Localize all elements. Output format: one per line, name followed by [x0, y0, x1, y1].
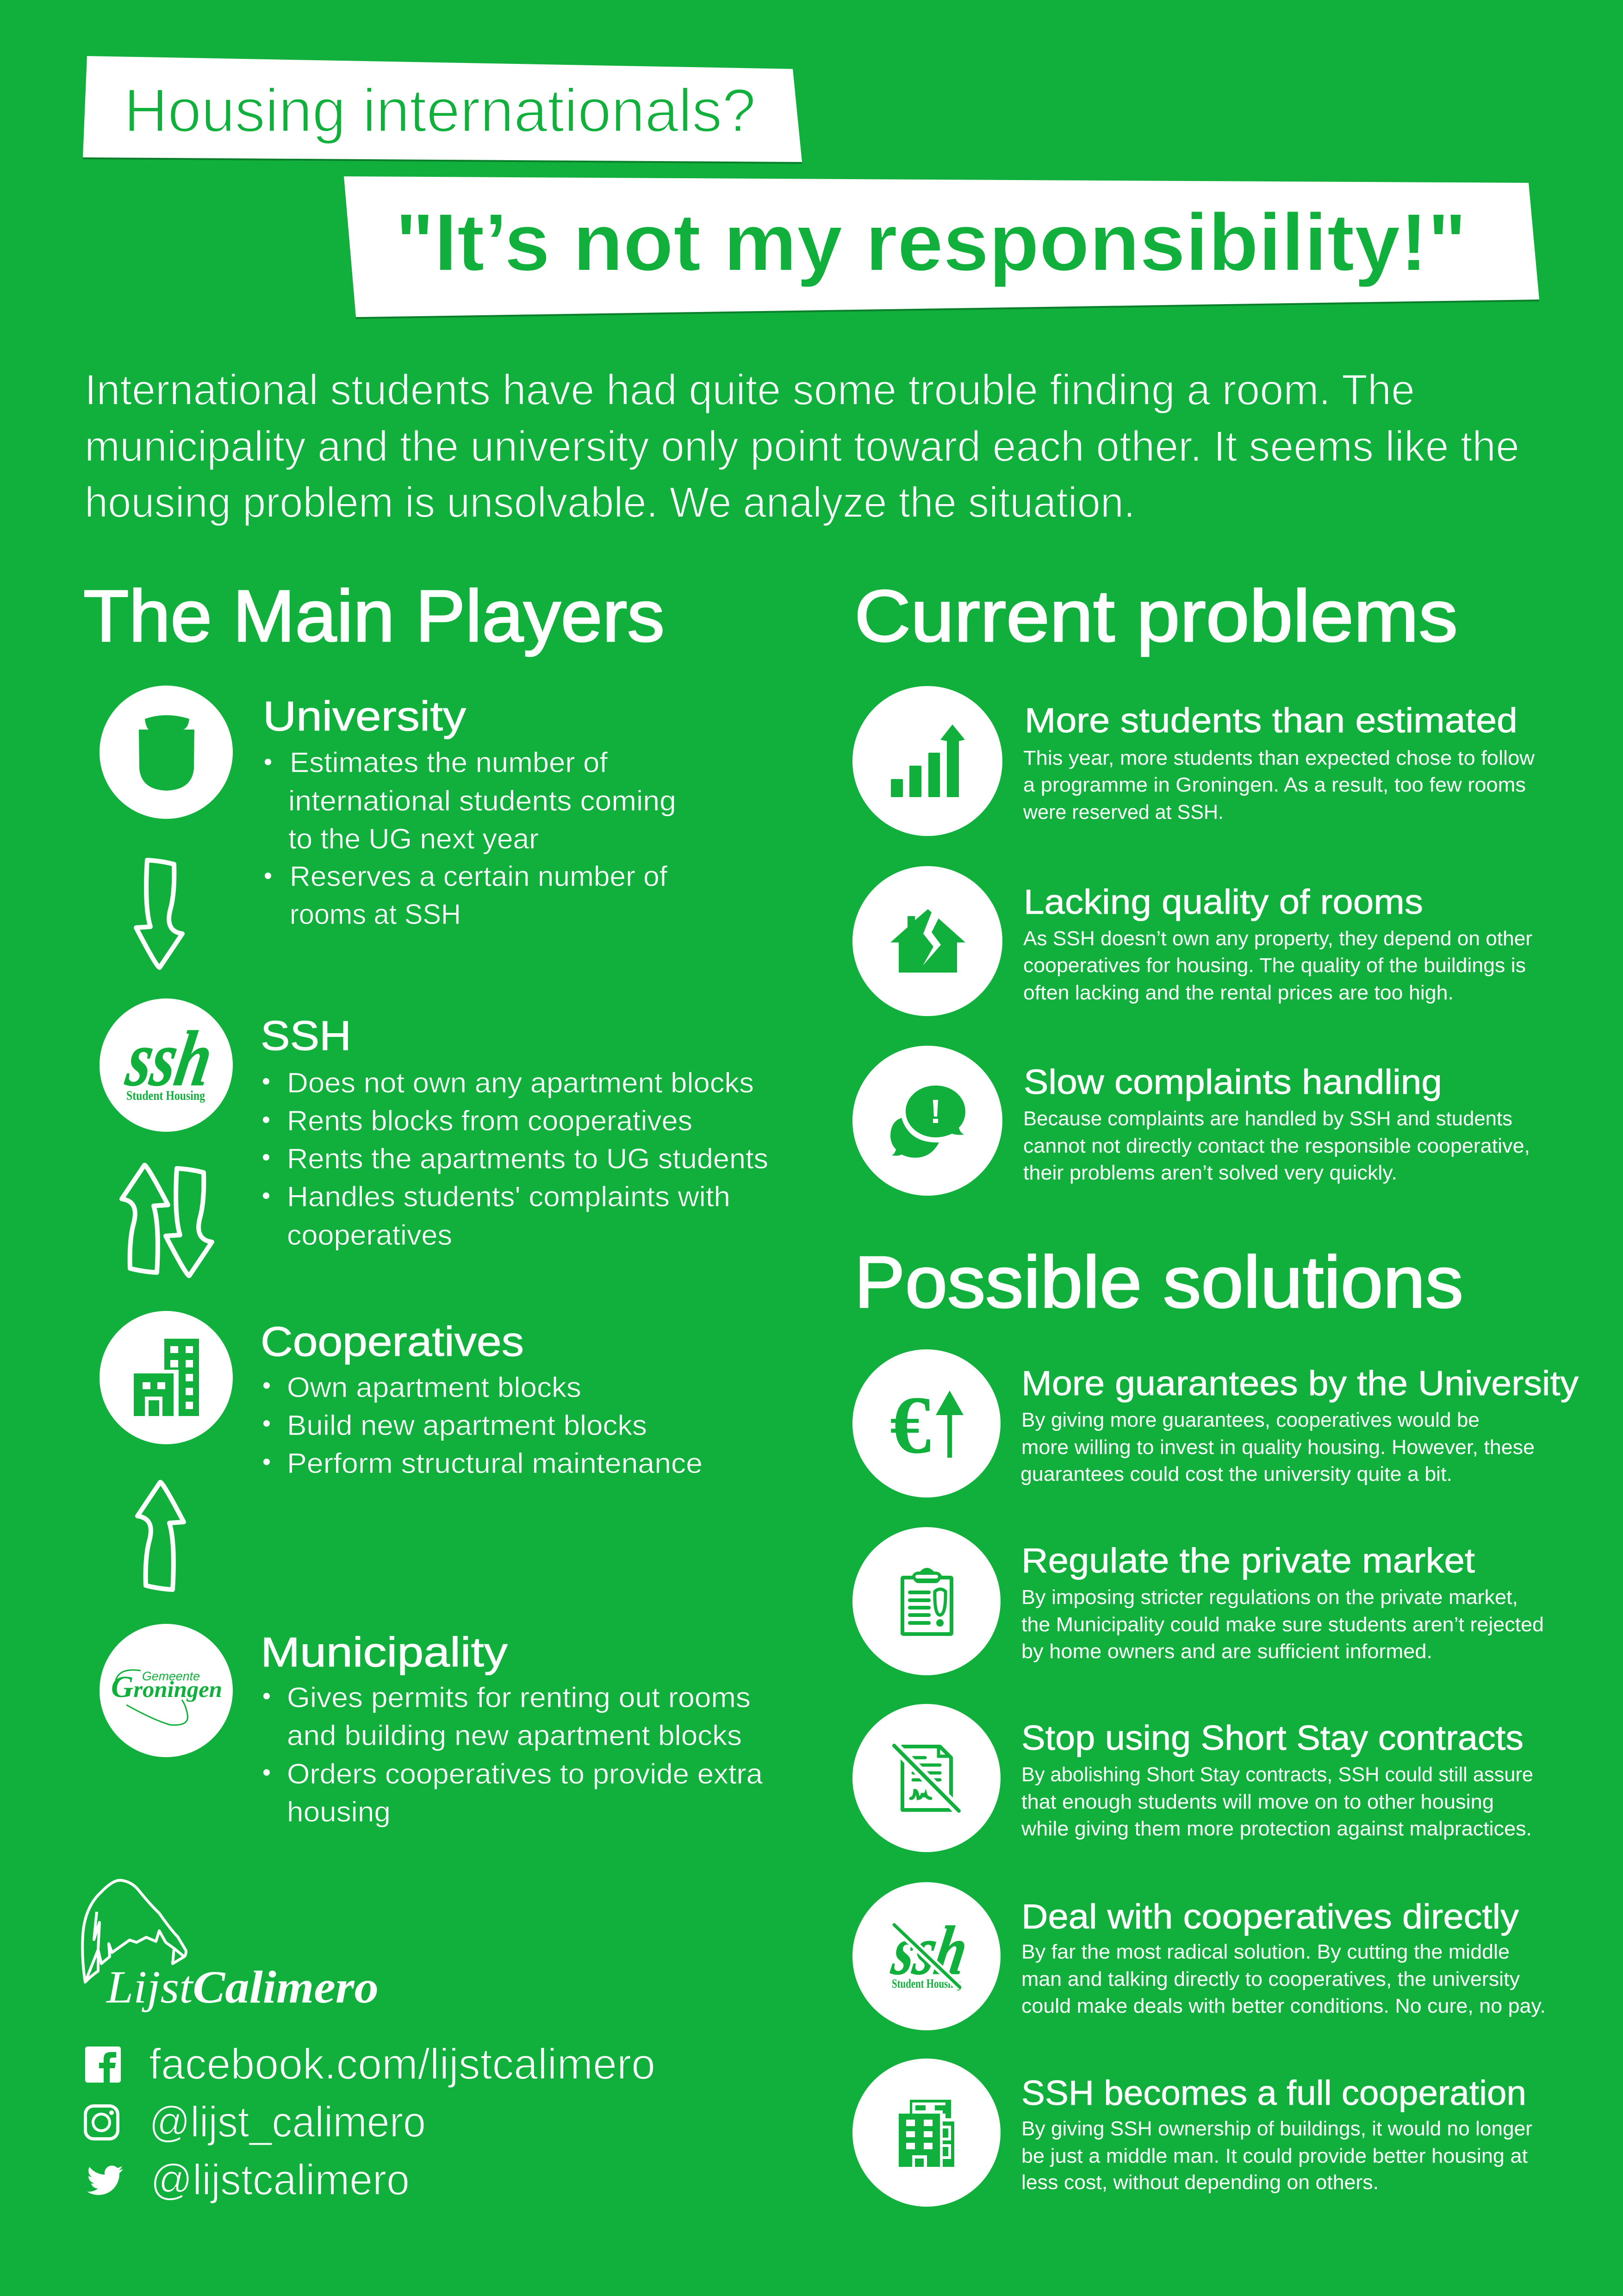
panel: Lacking quality of rooms — [852, 866, 1532, 1016]
icon: crossed-out SSH logo — [852, 1882, 1001, 2030]
text: Stop using Short Stay contracts: that enough students will move on to other housing — [1021, 1791, 1494, 1813]
social: instagram: @lijst_calimero — [149, 2097, 426, 2146]
arrows: SSH and cooperatives both ways — [122, 1165, 212, 1276]
icon: crossed-out SSH logo: ssh — [887, 1912, 973, 1989]
text: SSH details: Handles students' complaints with — [287, 1181, 730, 1213]
text: University details: Estimates the number of — [290, 747, 608, 779]
text: Regulate the private market: Regulate the private market — [1021, 1541, 1475, 1580]
text: Slow complaints handling — [1023, 1062, 1530, 1184]
panel: More guarantees by the University — [852, 1349, 1579, 1497]
text: Stop using Short Stay contracts: Stop using Short Stay contracts — [1021, 1718, 1524, 1757]
icon: university shield — [99, 686, 233, 819]
text: Slow complaints handling: cannot not directly contact the responsible cooperative, — [1023, 1135, 1530, 1157]
text: SSH becomes a full cooperation: less cost, without depending on others. — [1021, 2171, 1379, 2194]
text: More students than estimated — [1023, 701, 1535, 824]
title: Housing internationals — [83, 56, 802, 164]
text: Deal with cooperatives directly: could make deals with better conditions. No cure, no pay. — [1021, 1995, 1546, 2017]
icon: euro with arrow: € — [890, 1379, 931, 1471]
text: Lacking quality of rooms — [1023, 882, 1532, 1004]
intro text: housing problem is unsolvable. We analyze the situation. — [85, 478, 1135, 526]
heading: Current problems: Current problems — [854, 575, 1458, 657]
text: Deal with cooperatives directly — [1021, 1897, 1546, 2017]
text: More students than estimated: a programme in Groningen. As a result, too few rooms — [1023, 774, 1526, 796]
intro text: municipality and the university only point toward each other. It seems like the — [85, 422, 1519, 470]
text: Stop using Short Stay contracts: By abolishing Short Stay contracts, SSH could still assure — [1021, 1764, 1533, 1786]
text: University details: rooms at SSH — [290, 898, 461, 930]
social: facebook: facebook.com/lijstcalimero — [149, 2040, 655, 2088]
text: Municipality details: housing — [287, 1796, 391, 1828]
text: Deal with cooperatives directly: Deal with cooperatives directly — [1021, 1897, 1519, 1936]
icon: Gemeente Groningen logo: Groningen — [111, 1670, 222, 1704]
text: Lacking quality of rooms: As SSH doesn’t own any property, they depend on other — [1023, 928, 1532, 950]
text: Lacking quality of rooms: often lacking and the rental prices are too high. — [1023, 982, 1454, 1004]
logo: Lijst Calimero — [82, 1880, 379, 2013]
text: More students than estimated: were reserved at SSH. — [1023, 801, 1224, 824]
icon: cracked house — [852, 866, 1002, 1016]
text: More guarantees by the University — [1020, 1364, 1579, 1485]
icon: bar chart with arrow — [852, 686, 1002, 836]
text: SSH details: Does not own any apartment blocks — [287, 1067, 754, 1099]
panel: University — [99, 686, 676, 930]
icon: Gemeente Groningen logo — [99, 1624, 233, 1757]
text: Regulate the private market — [1021, 1541, 1544, 1663]
text: SSH details: Rents the apartments to UG students — [287, 1143, 768, 1175]
text: SSH details: cooperatives — [287, 1219, 452, 1251]
text: University details — [263, 693, 676, 930]
text: Cooperatives details: Own apartment blocks — [287, 1372, 581, 1404]
text: Lacking quality of rooms: Lacking quality of rooms — [1024, 882, 1423, 921]
text: Municipality details: Orders cooperatives to provide extra — [287, 1758, 763, 1790]
text: Cooperatives details: Cooperatives — [261, 1319, 524, 1365]
panel: Stop using Short Stay contracts — [852, 1704, 1533, 1852]
text: Deal with cooperatives directly: man and talking directly to cooperatives, the university — [1021, 1968, 1520, 1990]
icon: Gemeente Groningen logo: Gemeente — [142, 1669, 200, 1683]
text: University details: Reserves a certain number of — [290, 861, 668, 892]
intro text — [85, 366, 1519, 526]
icon: apartment buildings — [99, 1311, 233, 1444]
text: Stop using Short Stay contracts — [1021, 1718, 1533, 1840]
text: SSH becomes a full cooperation: be just a middle man. It could provide better housing at — [1021, 2145, 1528, 2167]
panel: SSH becomes a full cooperation — [852, 2059, 1532, 2207]
text: More guarantees by the University: more willing to invest in quality housing. However, these — [1021, 1436, 1535, 1459]
text: Slow complaints handling: Slow complaints handling — [1024, 1062, 1442, 1101]
text: SSH details — [261, 1013, 768, 1251]
icon: office building — [852, 2059, 1001, 2207]
text: University details: to the UG next year — [288, 823, 539, 855]
social: twitter: @lijstcalimero — [150, 2155, 410, 2204]
text: Municipality details — [261, 1629, 763, 1828]
intro text: International students have had quite some trouble finding a room. The — [85, 366, 1415, 414]
icon: SSH logo — [99, 998, 233, 1132]
title: It's not my responsibility: "It’s not my responsibility!" — [395, 197, 1467, 288]
panel: Deal with cooperatives directly — [852, 1882, 1546, 2030]
arrow: municipality to cooperatives — [137, 1482, 184, 1590]
text: Slow complaints handling: Because complaints are handled by SSH and students — [1023, 1108, 1512, 1130]
panel: Municipality — [99, 1624, 763, 1828]
icon: clipboard with warning — [852, 1527, 1001, 1675]
heading: The Main Players: The Main Players — [83, 575, 665, 657]
icon: speech bubbles — [852, 1046, 1002, 1196]
text: Slow complaints handling: their problems aren’t solved very quickly. — [1023, 1162, 1397, 1184]
text: More students than estimated: More students than estimated — [1025, 701, 1517, 740]
panel: Cooperatives — [99, 1311, 703, 1479]
title: It's not my responsibility — [344, 176, 1539, 319]
text: University details: University — [263, 693, 466, 740]
text: Stop using Short Stay contracts: while giving them more protection against malpractices. — [1021, 1818, 1532, 1840]
text: University details: international students coming — [288, 785, 676, 817]
text: Municipality details: and building new apartment blocks — [287, 1720, 742, 1752]
text: Deal with cooperatives directly: By far the most radical solution. By cutting the middle — [1021, 1941, 1510, 1963]
icon: crossed-out SSH logo: Student Housing — [892, 1977, 961, 1990]
arrow: university to SSH — [136, 860, 182, 967]
icon: SSH logo: Student Housing — [126, 1088, 205, 1103]
text: More guarantees by the University: More guarantees by the University — [1021, 1364, 1579, 1403]
text: Lacking quality of rooms: cooperatives for housing. The quality of the buildings is — [1023, 955, 1526, 977]
text: SSH details: Rents blocks from cooperatives — [287, 1105, 692, 1137]
text: Municipality details: Municipality — [261, 1629, 508, 1676]
text: Cooperatives details: Perform structural maintenance — [287, 1447, 703, 1479]
panel: Regulate the private market — [852, 1527, 1544, 1675]
heading: Possible solutions: Possible solutions — [854, 1242, 1463, 1323]
text: More guarantees by the University: By giving more guarantees, cooperatives would be — [1021, 1409, 1480, 1431]
icon: euro with arrow — [852, 1349, 1001, 1497]
title: Housing internationals: Housing internationals? — [124, 76, 756, 144]
text: SSH becomes a full cooperation: By giving SSH ownership of buildings, it would no longer — [1021, 2118, 1532, 2140]
text: SSH details: SSH — [261, 1013, 351, 1059]
panel: SSH — [99, 998, 768, 1251]
text: Regulate the private market: By imposing stricter regulations on the private market, — [1021, 1586, 1518, 1609]
icon: SSH logo: ssh — [121, 1015, 219, 1103]
logo: Lijst Calimero: LijstCalimero — [106, 1961, 379, 2013]
text: SSH becomes a full cooperation — [1021, 2073, 1532, 2194]
text: Regulate the private market: the Municipality could make sure students aren’t rejected — [1021, 1614, 1544, 1636]
text: More guarantees by the University: guarantees could cost the university quite a bit. — [1020, 1463, 1452, 1485]
panel: More students than estimated — [852, 686, 1535, 836]
text: Cooperatives details: Build new apartment blocks — [287, 1410, 647, 1441]
icon: crossed-out contract — [852, 1704, 1001, 1852]
text: Cooperatives details — [261, 1319, 703, 1479]
text: Municipality details: Gives permits for renting out rooms — [287, 1682, 751, 1714]
panel: Slow complaints handling — [852, 1046, 1530, 1196]
text: More students than estimated: This year, more students than expected chose to follow — [1023, 747, 1535, 769]
text: SSH becomes a full cooperation: SSH becomes a full cooperation — [1021, 2073, 1526, 2112]
text: Regulate the private market: by home owners and are sufficient informed. — [1021, 1641, 1432, 1663]
